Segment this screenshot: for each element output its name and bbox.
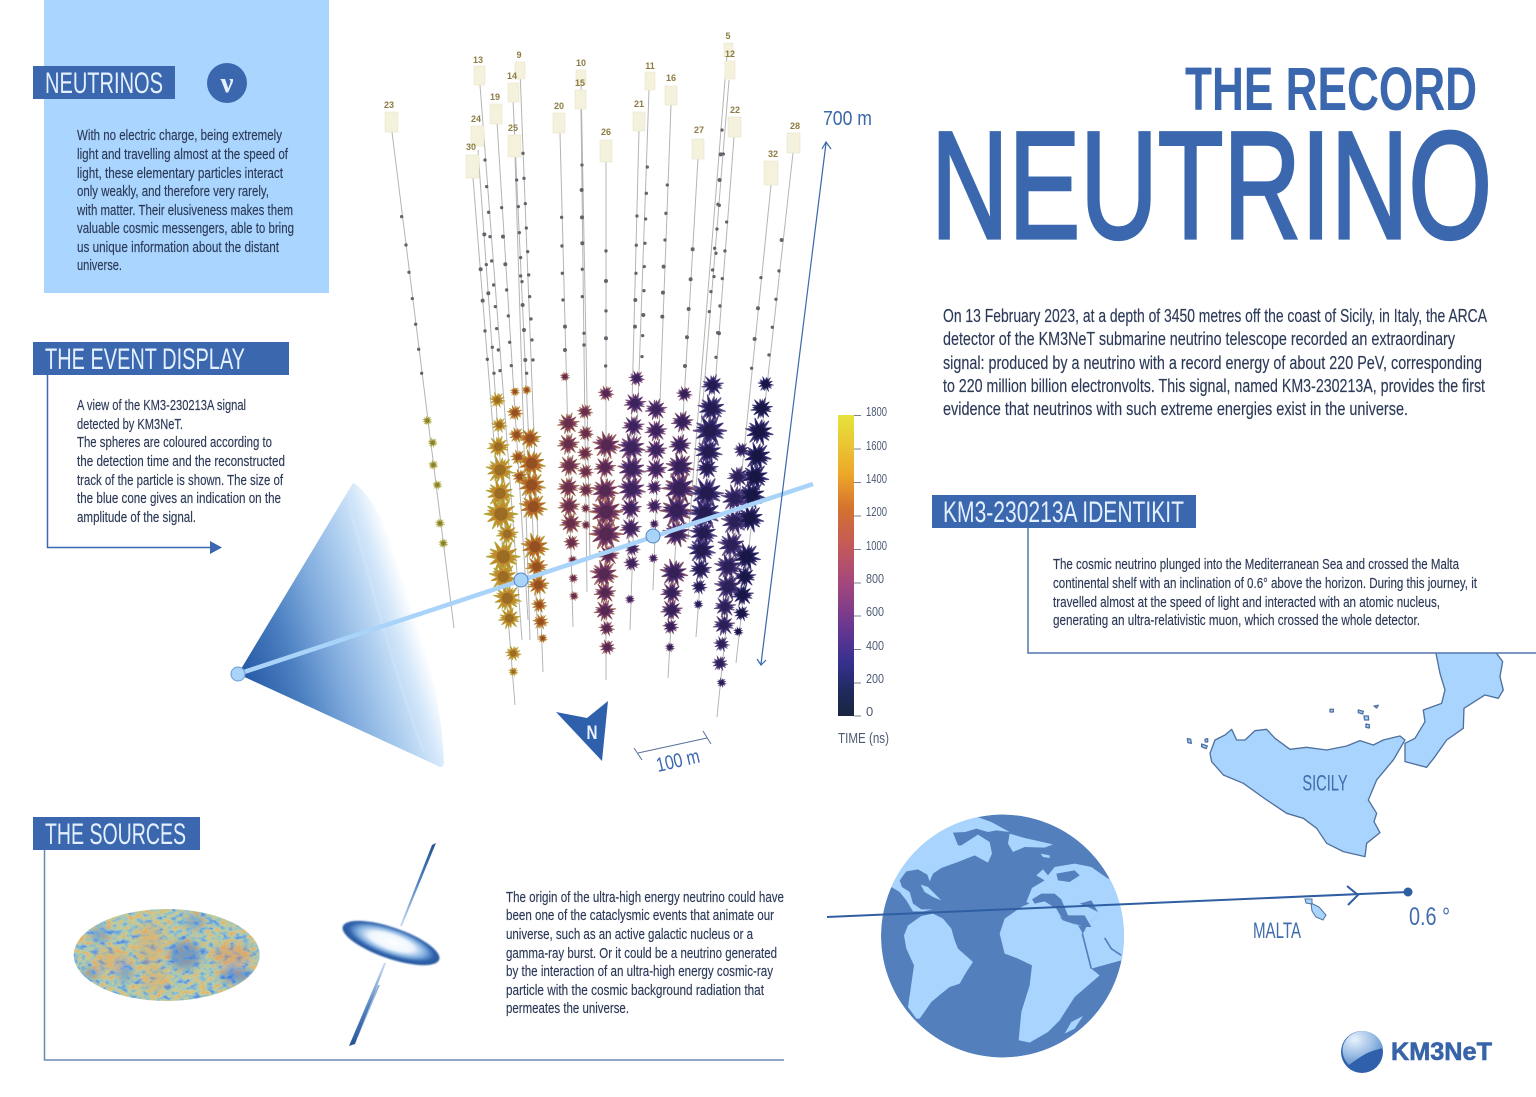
colour bar: detection time: 200: [866, 671, 884, 686]
colour bar: detection time: 1000: [866, 538, 887, 553]
text: event display description: [77, 397, 285, 526]
coloured hit spheres: [421, 368, 778, 689]
text: neutrinos description: valuable cosmic messengers, able to bring: [77, 220, 294, 237]
image: accretion disk with jets: [338, 843, 444, 1046]
labels: malta and angle: [1253, 903, 1450, 943]
text: event display description: detected by KM3NeT.: [77, 416, 183, 433]
text: introduction: evidence that neutrinos with such extreme energies exist in the universe.: [943, 398, 1408, 419]
text: sources description: [506, 889, 784, 1017]
text: event display description: The spheres are coloured according to: [77, 434, 272, 451]
string modules and numbers: 22: [730, 105, 740, 115]
text: neutrinos description: universe.: [77, 257, 122, 274]
labels: malta and angle: 0.6 °: [1409, 903, 1450, 931]
text: sources description: universe, such as an active galactic nucleus or a: [506, 926, 754, 943]
text: sources description: permeates the universe.: [506, 1000, 629, 1017]
panel: neutrinos: [33, 0, 329, 293]
colour bar: detection time: 600: [866, 604, 884, 619]
panel: the sources: [33, 817, 784, 1060]
icon: nu symbol: ν: [220, 67, 234, 99]
string modules and numbers: 5: [725, 31, 731, 41]
string modules and numbers: 16: [666, 73, 676, 83]
heading: neutrinos: NEUTRINOS: [45, 67, 163, 100]
text: event display description: amplitude of the signal.: [77, 509, 196, 526]
colour bar: detection time: 1200: [866, 504, 887, 519]
string modules and numbers: 25: [508, 123, 518, 133]
text: sources description: particle with the cosmic background radiation that: [506, 982, 765, 999]
text: event display description: A view of the KM3-230213A signal: [77, 397, 246, 414]
string modules and numbers: 26: [601, 127, 611, 137]
colour bar: detection time: 1400: [866, 471, 887, 486]
string modules and numbers: 28: [790, 121, 800, 131]
arrow: event display bracket: [48, 375, 222, 554]
text: neutrinos description: with matter. Their elusiveness makes them: [76, 202, 293, 219]
string modules and numbers: 32: [768, 149, 778, 159]
string modules and numbers: 19: [490, 92, 500, 102]
string sensor dots, upper part: [400, 128, 784, 375]
blue signal cone: [238, 483, 444, 767]
icon: nu symbol: [207, 63, 247, 103]
text: neutrinos description: With no electric charge, being extremely: [77, 127, 282, 144]
text: sources description: The origin of the ultra-high energy neutrino could have: [506, 889, 784, 906]
panel: the event display: [33, 342, 289, 554]
reconstructed particle track: [231, 484, 813, 681]
map: malta: [1305, 899, 1326, 920]
text: sources description: by the interaction of an ultra-high energy cosmic-ray: [506, 963, 773, 980]
string modules and numbers: 24: [471, 114, 481, 124]
text: event display description: the blue cone gives an indication on the: [77, 490, 281, 507]
heading: identikit: KM3-230213A IDENTIKIT: [943, 496, 1184, 529]
scale bar: 100 m: [634, 731, 711, 777]
text: event display description: track of the particle is shown. The size of: [77, 472, 284, 489]
colour bar: detection time: 1600: [866, 438, 887, 453]
map: sicily and calabria: SICILY: [1302, 771, 1348, 796]
colour bar: detection time: 0: [866, 704, 873, 719]
string modules and numbers: 20: [554, 101, 564, 111]
text: identikit description: [1053, 557, 1477, 629]
string modules and numbers: 23: [384, 100, 394, 110]
colour bar: detection time: 1800: [866, 404, 887, 419]
text: neutrinos description: only weakly, and therefore very rarely,: [77, 183, 269, 200]
logo: KM3NeT: [1341, 1031, 1492, 1073]
heading: the sources: THE SOURCES: [45, 818, 186, 851]
string modules and numbers: [384, 31, 800, 185]
string modules and numbers: 30: [466, 142, 476, 152]
globe: [875, 812, 1131, 1058]
string modules and numbers: 15: [575, 78, 585, 88]
image: cosmic microwave background map: [74, 909, 260, 1001]
text: identikit description: generating an ultra-relativistic muon, which crossed the whole detector.: [1053, 613, 1420, 629]
panel: identikit: [932, 495, 1536, 653]
string modules and numbers: 11: [645, 61, 655, 71]
string modules and numbers: 13: [473, 55, 483, 65]
text: identikit description: travelled almost at the speed of light and interacted with an atomic nucleus,: [1053, 595, 1440, 611]
heading: neutrinos: [33, 66, 175, 100]
icon: north marker: [556, 701, 608, 761]
text: sources description: been one of the cataclysmic events that animate our: [506, 907, 774, 924]
text: sources description: gamma-ray burst. Or it could be a neutrino generated: [506, 945, 777, 962]
text: introduction: [943, 305, 1487, 419]
string modules and numbers: 14: [507, 71, 517, 81]
colour bar: detection time: TIME (ns): [838, 730, 889, 747]
text: neutrinos description: light, these elementary particles interact: [77, 165, 284, 182]
colour bar: detection time: [838, 404, 889, 747]
text: neutrinos description: [76, 127, 294, 274]
string modules and numbers: 12: [725, 49, 735, 59]
heading: the sources: [33, 817, 200, 851]
string modules and numbers: 10: [576, 58, 586, 68]
arrow: 700 m height: 700 m: [823, 108, 872, 130]
string modules and numbers: 21: [634, 99, 644, 109]
arrow: neutrino path through the earth: [827, 886, 1412, 917]
icon: north marker: N: [586, 723, 598, 744]
colour bar: detection time: 800: [866, 571, 884, 586]
string modules and numbers: 27: [694, 125, 704, 135]
text: neutrinos description: us unique information about the distant: [77, 239, 280, 256]
map: sicily and calabria: [1187, 653, 1503, 857]
heading: the event display: THE EVENT DISPLAY: [45, 343, 245, 376]
heading: identikit: [932, 495, 1196, 529]
colour bar: detection time: 400: [866, 638, 884, 653]
scale bar: 100 m: 100 m: [654, 746, 702, 777]
labels: malta and angle: MALTA: [1253, 918, 1301, 943]
string modules and numbers: 9: [516, 50, 522, 60]
detection strings: [392, 55, 793, 717]
arrow: 700 m height: [757, 108, 872, 665]
text: neutrinos description: light and travelling almost at the speed of: [77, 146, 289, 163]
logo: KM3NeT: KM3NeT: [1391, 1038, 1492, 1066]
text: event display description: the detection time and the reconstructed: [77, 453, 285, 470]
